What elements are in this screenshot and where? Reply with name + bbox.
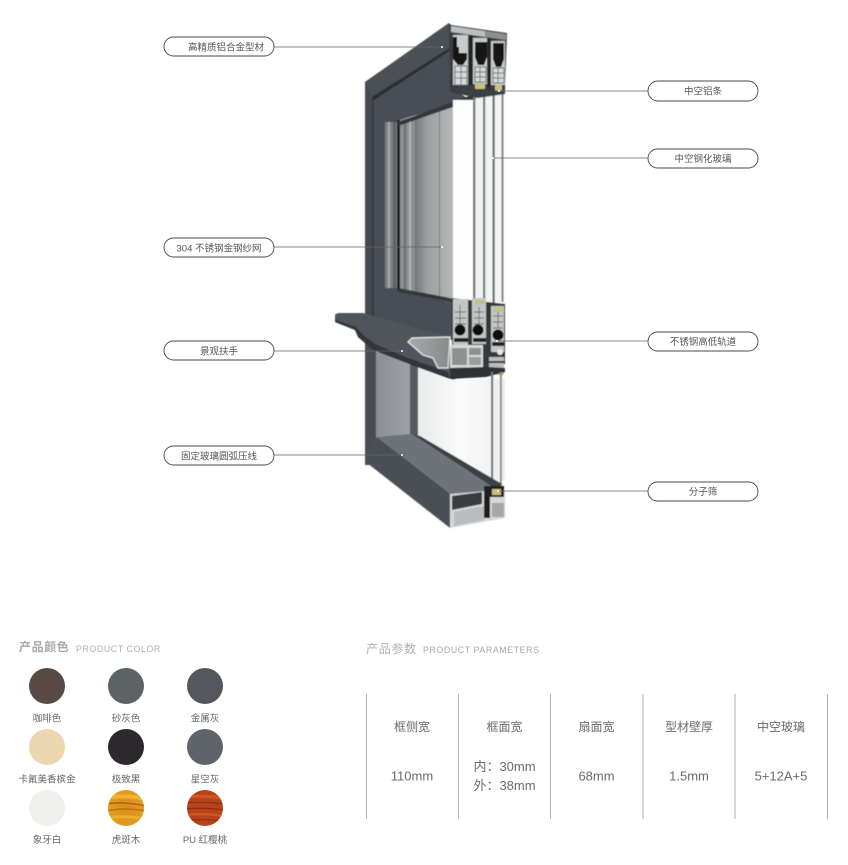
opening reveal (385, 122, 398, 288)
callout: glass bead: 固定玻璃圆弧压线 (181, 450, 257, 462)
swatch: tiger wood (108, 790, 144, 844)
column: frame face width: 内：30mm (473, 759, 536, 774)
column: frame face width: 框面宽 (486, 719, 523, 734)
swatch: sand grey (108, 668, 144, 724)
product parameters heading: PRODUCT PARAMETERS (423, 645, 540, 655)
column: frame face width (473, 719, 536, 793)
swatch: star grey: 星空灰 (191, 774, 219, 786)
column: frame side width: 110mm (391, 768, 433, 784)
column: wall thickness: 型材壁厚 (665, 719, 713, 734)
callout: glass bead (164, 446, 274, 465)
sash interior (400, 97, 476, 304)
column: sash face width (578, 719, 615, 784)
middle rail (449, 298, 505, 380)
column: insulated glass (755, 719, 807, 784)
callout: high-precision aluminium: 高精质铝合金型材 (188, 42, 264, 54)
upper frame body (365, 23, 470, 340)
swatch: champagne (18, 729, 76, 786)
callout: 304 mesh (164, 238, 274, 257)
swatch: PU red cherry (183, 790, 228, 846)
callout: molecular sieve (648, 482, 758, 501)
column: frame side width: 框侧宽 (394, 719, 430, 734)
lower rail box (450, 345, 483, 368)
column: sash face width: 扇面宽 (578, 719, 615, 734)
column: frame face width: 外：38mm (473, 778, 536, 793)
callout: spacer (648, 81, 758, 101)
swatch: black: 极致黑 (112, 774, 141, 786)
callout: handrail: 景观扶手 (200, 346, 238, 358)
leader lines (274, 46, 648, 492)
swatch: PU red cherry: PU 红樱桃 (183, 834, 228, 846)
product colour heading (19, 639, 161, 654)
scenic handrail (335, 313, 450, 379)
swatch: metal grey: 金属灰 (191, 712, 219, 724)
swatch: coffee: 咖啡色 (33, 712, 62, 724)
insect mesh (415, 105, 453, 299)
window cross-section product image (335, 23, 507, 528)
rail chambers (453, 299, 468, 345)
product parameters heading (366, 641, 540, 656)
swatch: tiger wood: 虎斑木 (112, 834, 141, 846)
top section profile (449, 23, 507, 98)
lower frame (365, 340, 505, 528)
frame left edge (365, 82, 374, 322)
lower glass (418, 367, 505, 484)
swatch: ivory: 象牙白 (33, 834, 61, 846)
column: wall thickness (665, 719, 713, 784)
spacer bars (475, 83, 485, 89)
product colour heading: 产品颜色 (19, 639, 69, 654)
callout: high-precision aluminium (164, 37, 274, 56)
callout: spacer: 中空铝条 (684, 86, 722, 98)
chamber 2 (473, 38, 487, 84)
swatch: sand grey: 砂灰色 (112, 712, 141, 724)
frame top face (365, 23, 451, 97)
sill front (365, 437, 452, 528)
callout: track (648, 332, 758, 351)
swatch: star grey (187, 729, 223, 786)
callout: handrail (164, 341, 274, 360)
swatch: ivory (29, 790, 65, 846)
column: frame side width (391, 719, 433, 784)
sill floor (377, 434, 497, 495)
callout: 304 mesh: 304 不锈钢金钢纱网 (176, 242, 262, 254)
glass panes (453, 100, 474, 300)
swatch: champagne: 卡氟美香槟金 (18, 774, 76, 786)
swatch: black (108, 729, 144, 786)
product colour heading: PRODUCT COLOR (76, 644, 161, 654)
column: insulated glass: 中空玻璃 (757, 719, 805, 734)
callout: tempered glass (648, 149, 758, 168)
callout: track: 不锈钢高低轨道 (670, 336, 737, 348)
product parameters heading: 产品参数 (366, 641, 417, 656)
swatch: metal grey (187, 668, 223, 724)
sash top shadow (398, 88, 505, 126)
column: wall thickness: 1.5mm (669, 768, 709, 784)
chamber 1 (453, 35, 468, 85)
chamber 3 (491, 41, 505, 85)
column: insulated glass: 5+12A+5 (755, 768, 807, 784)
swatch: coffee (29, 668, 65, 724)
column: sash face width: 68mm (578, 768, 615, 784)
callout: molecular sieve: 分子筛 (689, 486, 717, 498)
callout: tempered glass: 中空钢化玻璃 (674, 153, 732, 165)
parameters table (366, 694, 828, 819)
